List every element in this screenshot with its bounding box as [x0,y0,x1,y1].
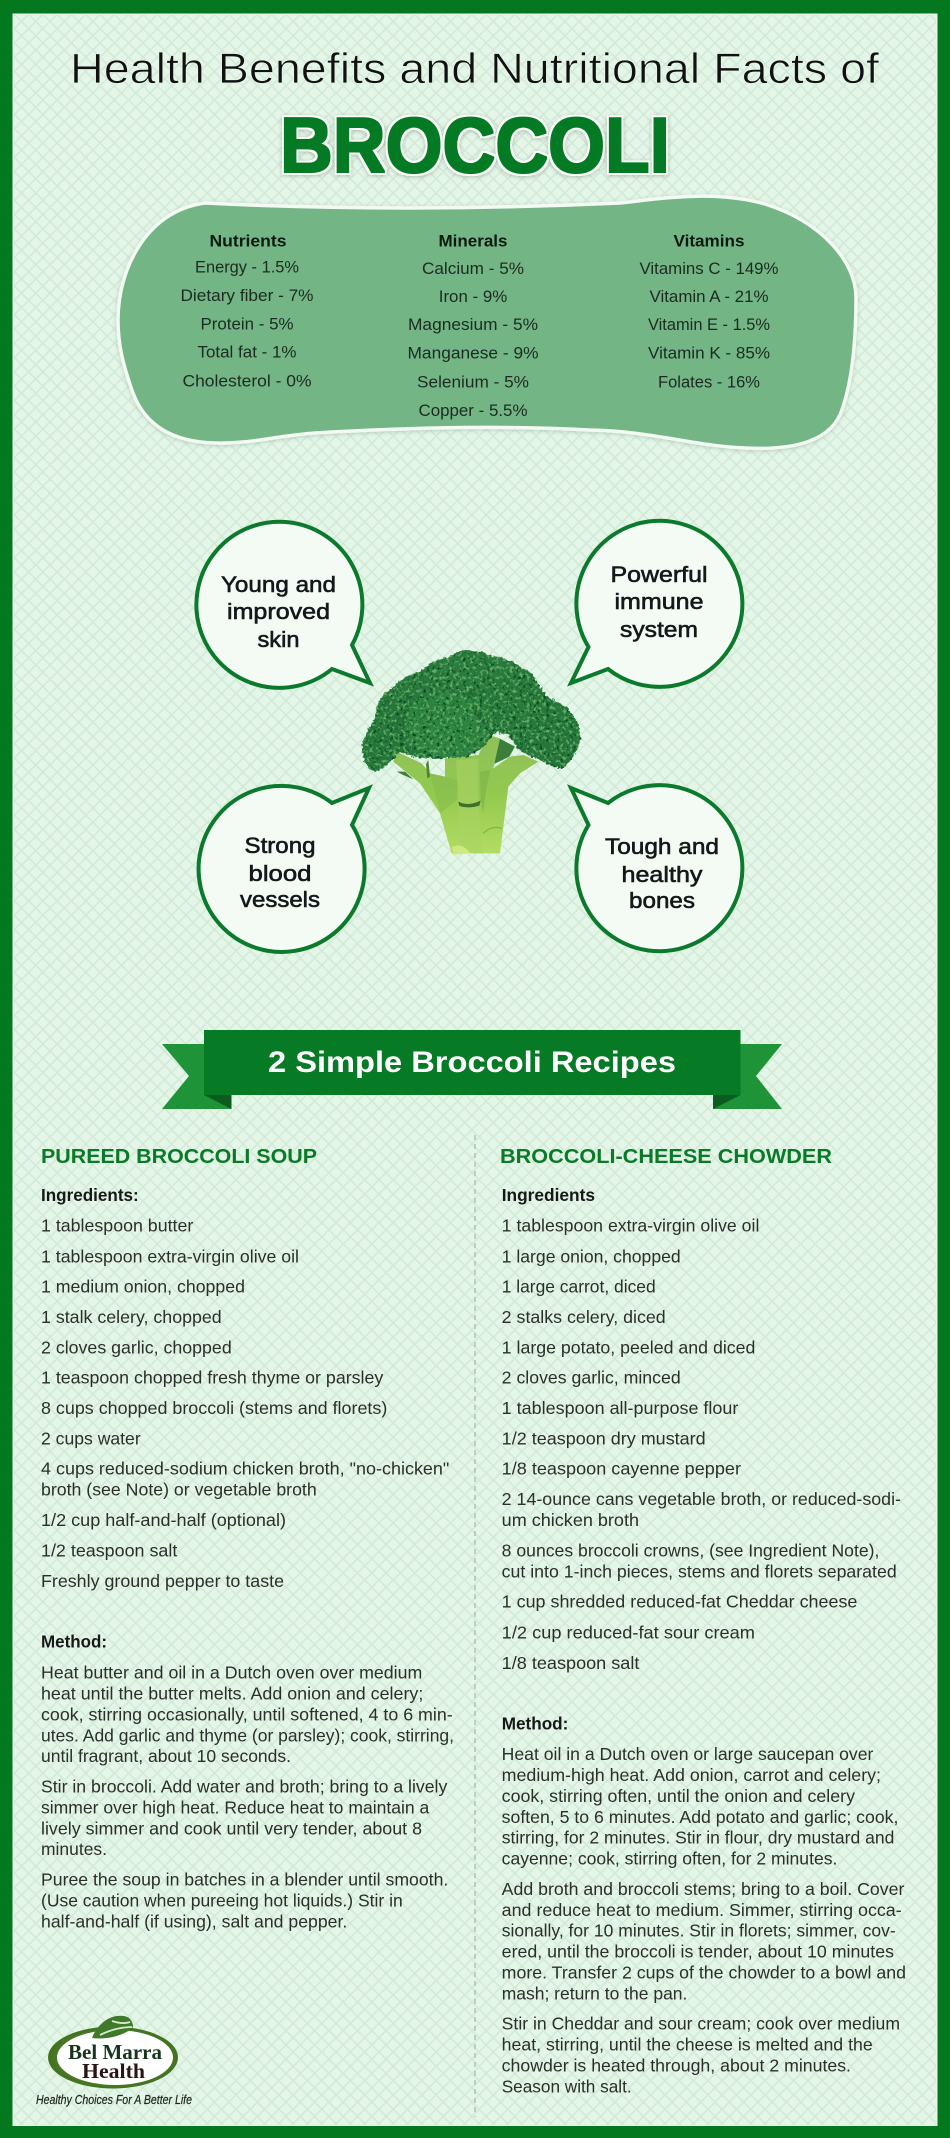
method text: ered, until the broccoli is tender, about 10 minutes [502,1942,894,1962]
ingredients list: cut into 1-inch pieces, stems and florets separated [502,1561,897,1581]
minerals column: Magnesium - 5% [408,315,538,334]
ingredients list: Ingredients: [41,1185,139,1205]
vitamins column: Vitamin A - 21% [650,287,768,306]
logo wordmark: Bel Marra [68,2040,163,2064]
ingredients list: Ingredients [502,1185,595,1205]
method text: medium-high heat. Add onion, carrot and celery; [502,1765,881,1785]
method text: Puree the soup in batches in a blender until smooth. [41,1869,448,1889]
speech bubble: tough and healthy bones: bones [629,888,695,913]
method text: Season with salt. [502,2077,632,2097]
nutrients column: Total fat - 1% [198,343,296,362]
method text: heat until the butter melts. Add onion and celery; [41,1683,423,1703]
speech bubble: strong blood vessels: vessels [240,887,320,912]
method text: lively simmer and cook until very tender, about 8 [41,1818,422,1838]
ingredients list: 1 teaspoon chopped fresh thyme or parsley [41,1368,384,1388]
illustration: broccoli [362,650,580,855]
speech bubble: young and improved skin: improved [227,599,330,624]
ingredients list: 1 stalk celery, chopped [41,1307,222,1327]
method text: heat, stirring, until the cheese is melted and the [502,2035,873,2055]
ingredients list: 8 ounces broccoli crowns, (see Ingredient Note), [502,1540,879,1560]
method text: Method: [502,1713,568,1733]
ingredients list [41,1185,449,1591]
florets [362,650,580,772]
minerals column: Selenium - 5% [417,372,529,391]
ingredients list: broth (see Note) or vegetable broth [41,1480,317,1500]
speech bubble: powerful immune system [571,521,742,687]
speech bubble: strong blood vessels [199,786,369,952]
banner text: 2 Simple Broccoli Recipes [268,1046,676,1079]
speech bubble: tough and healthy bones [571,785,742,951]
ingredients list [502,1185,901,1673]
ribbon main band [204,1030,740,1095]
method text: and reduce heat to medium. Simmer, stirring occa- [502,1900,902,1920]
ingredients list: 1/8 teaspoon cayenne pepper [502,1459,741,1479]
method text: more. Transfer 2 cups of the chowder to a bowl and [502,1963,906,1983]
minerals column: Manganese - 9% [408,344,538,363]
ingredients list: 1/2 teaspoon salt [41,1541,177,1561]
vitamins column: Vitamin E - 1.5% [648,315,770,334]
speech bubble: tough and healthy bones: healthy [622,862,703,887]
ingredients list: 1 medium onion, chopped [41,1277,245,1297]
ingredients list: 1/2 cup reduced-fat sour cream [502,1622,755,1642]
ingredients list: 1/8 teaspoon salt [502,1653,640,1673]
method text: Stir in broccoli. Add water and broth; bring to a lively [41,1776,448,1796]
minerals column: Iron - 9% [439,287,507,306]
ingredients list: 2 cloves garlic, minced [502,1368,681,1388]
ingredients list: 2 stalks celery, diced [502,1307,666,1327]
speech bubble: powerful immune system: system [620,617,698,642]
method text: simmer over high heat. Reduce heat to maintain a [41,1797,430,1817]
ribbon right fold [713,1095,740,1109]
method text: cook, stirring occasionally, until softened, 4 to 6 min- [41,1704,453,1724]
nutrients column: Dietary fiber - 7% [180,286,314,305]
panel: nutrition facts [118,196,856,448]
column divider [474,1135,476,2117]
method text: Heat butter and oil in a Dutch oven over medium [41,1662,422,1682]
method text [41,1631,454,1931]
method text: until fragrant, about 10 seconds. [41,1746,291,1766]
minerals column: Calcium - 5% [422,259,524,278]
vitamins column [640,232,778,391]
ribbon left tail [162,1044,232,1109]
green blob background [118,196,856,448]
ingredients list: 1/2 teaspoon dry mustard [502,1428,706,1448]
method text: cook, stirring often, until the onion and celery [502,1786,855,1806]
ingredients list: 8 cups chopped broccoli (stems and florets) [41,1398,387,1418]
method text: stirring, for 2 minutes. Stir in flour, dry mustard and [502,1828,894,1848]
ingredients list: 2 14-ounce cans vegetable broth, or reduced-sodi- [502,1489,901,1509]
ingredients list: 1 tablespoon extra-virgin olive oil [502,1216,759,1236]
ingredients list: 1 tablespoon extra-virgin olive oil [41,1246,299,1266]
speech bubble: young and improved skin [196,522,370,688]
nutrients column: Energy - 1.5% [195,258,299,277]
recipe: pureed broccoli soup [41,1146,454,1931]
speech bubble: strong blood vessels: blood [248,861,312,886]
minerals column: Copper - 5.5% [418,401,528,420]
method text: Heat oil in a Dutch oven or large saucepan over [502,1744,874,1764]
speech bubble: young and improved skin: Young and [221,572,336,597]
method text: half-and-half (if using), salt and pepper. [41,1911,347,1931]
ingredients list: 2 cloves garlic, chopped [41,1337,232,1357]
ingredients list: 1/2 cup half-and-half (optional) [41,1510,286,1530]
method text: Method: [41,1631,107,1651]
nutrients column [180,232,314,391]
method text: chowder is heated through, about 2 minutes. [502,2056,851,2076]
speech bubble: tough and healthy bones: Tough and [605,834,719,859]
vitamins column: Vitamins [674,232,744,251]
method text: utes. Add garlic and thyme (or parsley); cook, stirring, [41,1725,454,1745]
ingredients list: 1 large potato, peeled and diced [502,1337,755,1357]
method text: minutes. [41,1839,107,1859]
method text: cayenne; cook, stirring often, for 2 minutes. [502,1849,837,1869]
stem [393,735,538,855]
method text: soften, 5 to 6 minutes. Add potato and garlic; cook, [502,1807,898,1827]
method text: Add broth and broccoli stems; bring to a boil. Cover [502,1879,905,1899]
ingredients list: 4 cups reduced-sodium chicken broth, "no-chicken" [41,1459,449,1479]
ingredients list: 1 tablespoon all-purpose flour [502,1398,739,1418]
title: Health Benefits and Nutritional Facts of [70,45,880,93]
method text: (Use caution when pureeing hot liquids.) Stir in [41,1890,403,1910]
speech bubble: powerful immune system: immune [614,589,704,614]
banner: 2 simple broccoli recipes [162,1030,782,1109]
method text: mash; return to the pan. [502,1983,687,2003]
logo: Bel Marra Health [36,2016,192,2107]
speech bubble: strong blood vessels: Strong [244,833,316,858]
nutrients column: Nutrients [210,232,286,251]
ingredients list: 1 cup shredded reduced-fat Cheddar cheese [502,1592,857,1612]
vitamins column: Vitamin K - 85% [648,344,770,363]
title: BROCCOLI: BROCCOLI [280,101,670,189]
speech bubble: powerful immune system: Powerful [610,562,708,587]
recipe: broccoli-cheese chowder [500,1146,906,2097]
ingredients list: 1 large onion, chopped [502,1246,681,1266]
minerals column [408,232,538,420]
logo tagline: Healthy Choices For A Better Life [36,2093,192,2107]
ingredients list: 1 tablespoon butter [41,1216,193,1236]
logo: Bel Marra Health: Health [82,2059,145,2083]
vitamins column: Folates - 16% [658,372,760,391]
recipe heading: PUREED BROCCOLI SOUP [41,1146,317,1168]
nutrients column: Cholesterol - 0% [182,372,312,391]
method text [502,1713,906,2097]
minerals column: Minerals [438,232,508,251]
recipe heading: BROCCOLI-CHEESE CHOWDER [500,1146,833,1168]
nutrients column: Protein - 5% [200,314,294,333]
method text: sionally, for 10 minutes. Stir in florets; simmer, cov- [502,1921,896,1941]
logo leaf [92,2016,133,2038]
speech bubble: young and improved skin: skin [258,627,300,652]
logo oval [48,2026,178,2088]
ingredients list: 1 large carrot, diced [502,1277,656,1297]
ingredients list: Freshly ground pepper to taste [41,1571,284,1591]
vitamins column: Vitamins C - 149% [640,259,778,278]
ingredients list: 2 cups water [41,1428,141,1448]
ribbon right tail [713,1044,782,1109]
method text: Stir in Cheddar and sour cream; cook over medium [502,2014,900,2034]
ingredients list: um chicken broth [502,1510,639,1530]
ribbon left fold [204,1095,232,1109]
